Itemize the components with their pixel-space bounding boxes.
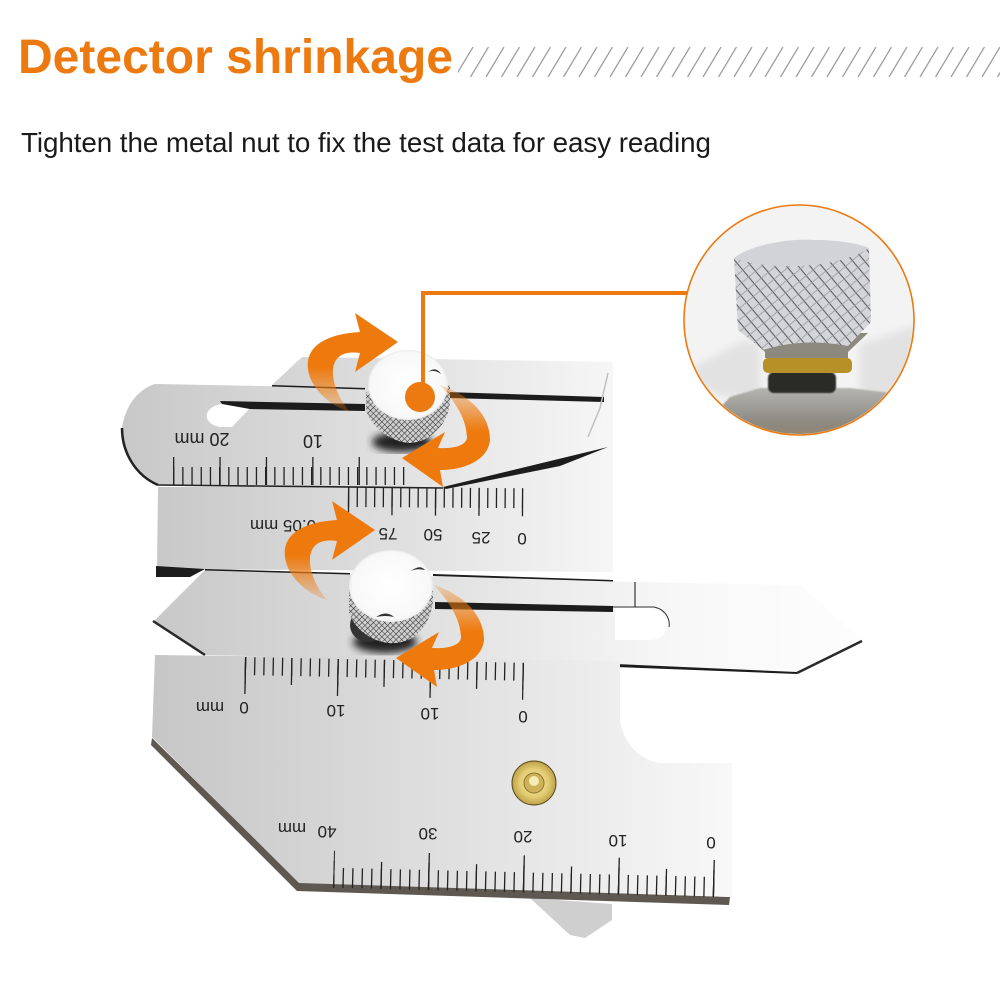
upper knob bbox=[366, 350, 450, 452]
inset neck bbox=[762, 333, 868, 358]
arrow: upper left bbox=[308, 313, 398, 412]
upper plate scale labels: 75 bbox=[379, 524, 397, 543]
bottom scale labels: 10 bbox=[609, 831, 627, 850]
bottom scale labels: 30 bbox=[419, 824, 437, 843]
leader dot bbox=[405, 382, 435, 412]
inset dark stem bbox=[768, 372, 836, 393]
upper blade scale labels bbox=[174, 429, 323, 451]
upper blade scale labels: 20 mm bbox=[174, 429, 230, 449]
bottom scale labels bbox=[278, 819, 716, 852]
lower blade slot bbox=[615, 608, 667, 640]
bottom scale labels: 40 bbox=[318, 822, 336, 841]
inset knob top bbox=[734, 240, 869, 266]
inset base bbox=[722, 387, 887, 434]
upper blade base line bbox=[158, 485, 443, 488]
middle scale labels: 10 bbox=[421, 704, 439, 723]
icon: brass rivet bbox=[512, 761, 556, 805]
inset: knob close-up bbox=[684, 205, 915, 440]
lower knob bbox=[349, 550, 433, 653]
lower blade edges bbox=[153, 621, 862, 673]
weld gauge bbox=[122, 357, 862, 938]
middle ruler bbox=[245, 666, 524, 681]
inset base glow bbox=[778, 432, 821, 434]
leader line bbox=[423, 293, 688, 390]
inset knurled side bbox=[734, 248, 871, 350]
hatched title band bbox=[458, 47, 1000, 77]
subtitle: Tighten the metal nut to fix the test data for easy reading bbox=[21, 127, 711, 158]
bottom scale labels: 0 bbox=[706, 833, 716, 852]
upper blade scale labels: 10 bbox=[303, 431, 323, 451]
bottom scale labels: mm bbox=[278, 819, 306, 838]
upper plate scale labels: 50 bbox=[424, 525, 442, 544]
middle scale labels bbox=[196, 698, 528, 726]
upper plate scale labels: 0 bbox=[517, 529, 527, 548]
blade tip cut bbox=[588, 373, 608, 437]
lower blade bbox=[153, 570, 862, 673]
upper blade slit shadow bbox=[220, 385, 608, 489]
upper blade slot bbox=[207, 404, 254, 427]
arrow: upper right bbox=[402, 385, 490, 487]
upper blade bbox=[122, 384, 608, 487]
upper plate scale labels bbox=[250, 516, 527, 548]
blade stop line bbox=[634, 582, 636, 607]
inset brass washer bbox=[763, 358, 852, 373]
upper back plate bbox=[157, 357, 613, 572]
arrow: lower right bbox=[396, 585, 484, 687]
bottom plate edge bbox=[151, 738, 730, 905]
arrow: lower left bbox=[285, 501, 375, 600]
bottom ruler bbox=[333, 869, 714, 887]
middle scale labels: 0 bbox=[239, 698, 249, 717]
bottom scale labels: 20 bbox=[514, 827, 532, 846]
middle scale labels: mm bbox=[196, 698, 224, 717]
small lower blade tip bbox=[530, 898, 612, 938]
slit shadow bbox=[156, 566, 797, 674]
middle scale labels: 10 bbox=[327, 701, 345, 720]
upper plate scale labels: 0.05 mm bbox=[250, 516, 316, 535]
upper blade black edge bbox=[122, 428, 158, 485]
bottom plate bbox=[152, 655, 732, 897]
middle scale labels: 0 bbox=[518, 707, 528, 726]
inset background plate bbox=[695, 328, 912, 397]
upper plate scale labels: 25 bbox=[472, 528, 490, 547]
slot top edge bbox=[613, 607, 669, 627]
upper plate ruler bbox=[348, 497, 524, 502]
title: Detector shrinkage bbox=[18, 31, 453, 84]
upper blade ruler bbox=[173, 471, 405, 476]
